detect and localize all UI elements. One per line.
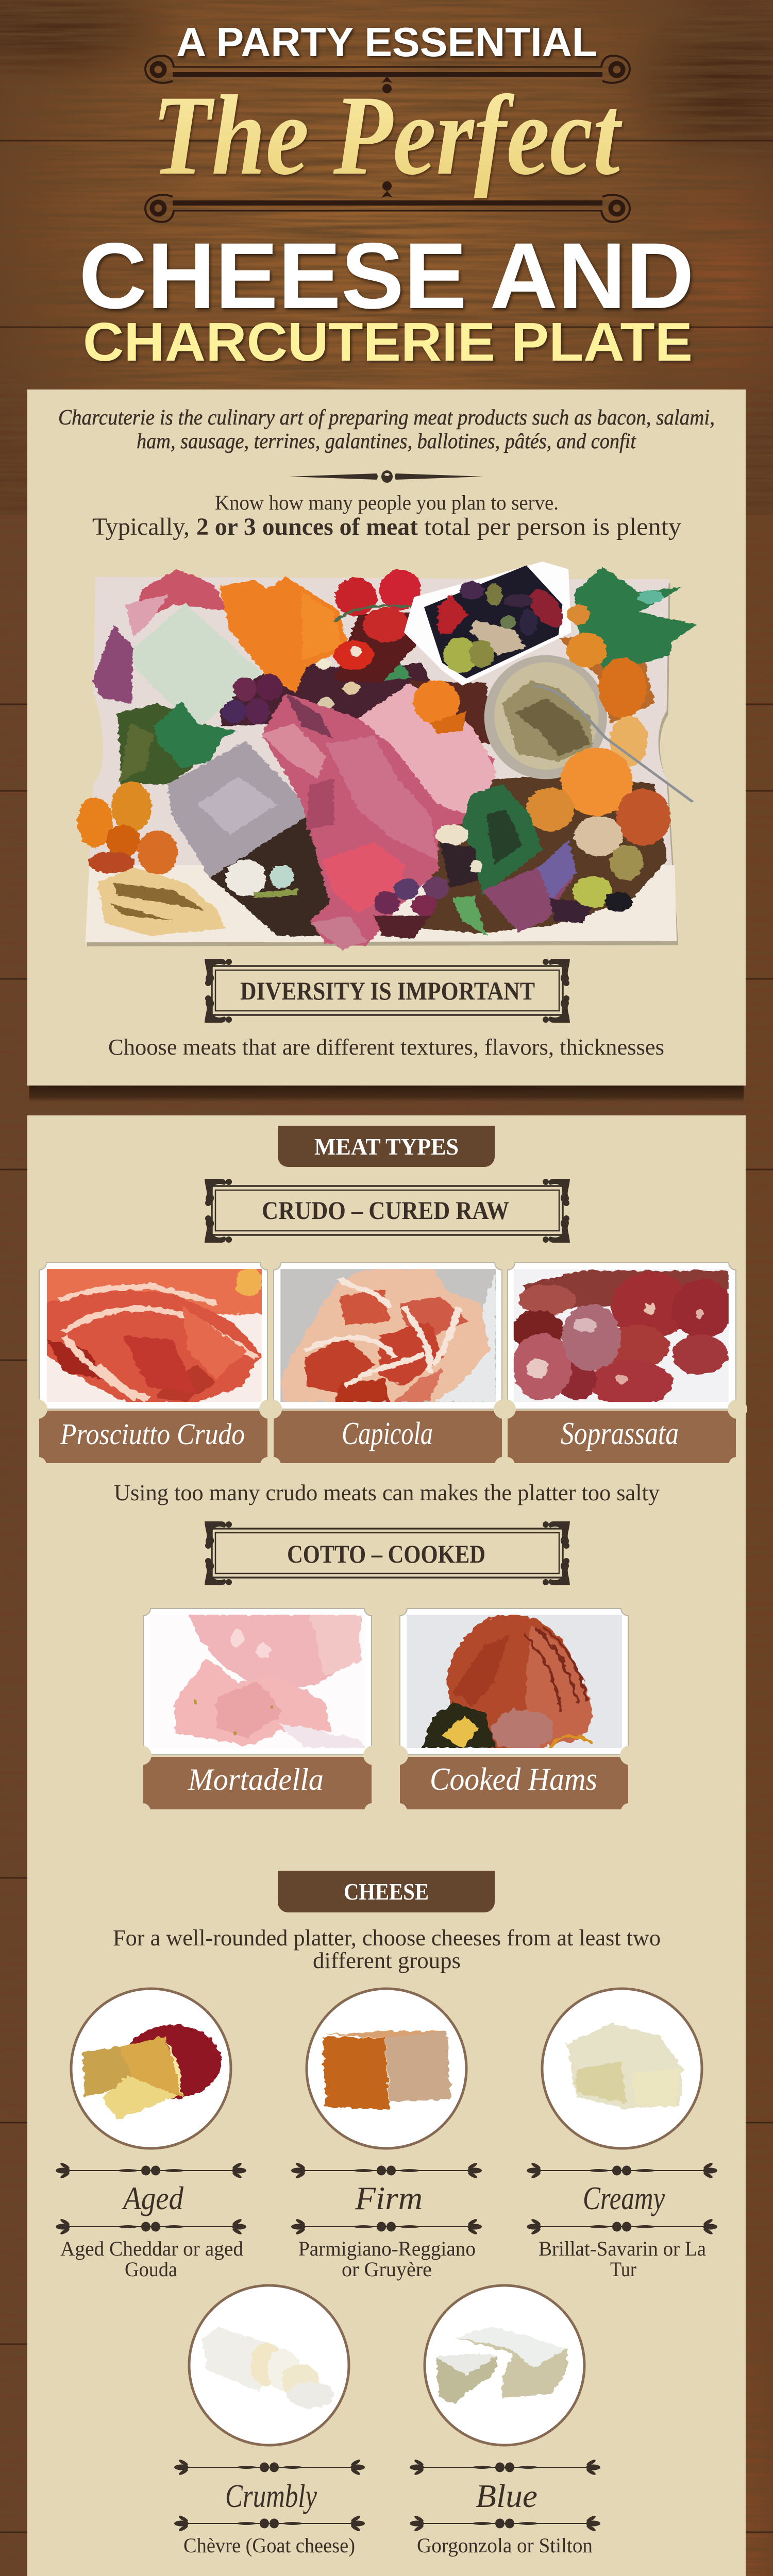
label: prosciutto crudo (28, 1399, 279, 1472)
ornament: lower scroll rule (145, 181, 630, 222)
heading frame: diversity is important: DIVERSITY IS IMPORTANT (240, 976, 535, 1005)
text: blue examples: Gorgonzola or Stilton (417, 2534, 593, 2557)
divider (174, 2459, 365, 2476)
title: the perfect: The Perfect (152, 72, 623, 199)
cheese: crumbly (174, 2285, 365, 2557)
ornament: top scroll rule (145, 56, 630, 93)
pill heading: meat types (278, 1126, 495, 1167)
intro italic text (58, 406, 715, 453)
text: creamy examples: Tur (610, 2258, 636, 2281)
panel: meat types and cheese (27, 1115, 747, 2576)
cheese: blue (410, 2285, 600, 2557)
text: firm examples: or Gruyère (342, 2258, 432, 2281)
icon: crumbly cheese circle (189, 2285, 349, 2445)
title: cheese and: CHEESE AND (79, 223, 694, 328)
card: mortadella (143, 1608, 372, 1755)
text: firm examples: Parmigiano-Reggiano (298, 2237, 476, 2260)
heading frame: crudo cured raw (205, 1179, 570, 1243)
text: crudo warning: Using too many crudo meats can makes the platter too salty (114, 1480, 660, 1505)
cheese: aged (56, 1989, 246, 2281)
label: firm: Firm (355, 2180, 423, 2216)
icon: aged cheese circle (71, 1989, 231, 2148)
panel: introduction (27, 389, 746, 1102)
label: soprassata (496, 1399, 747, 1472)
heading frame: cotto cooked (205, 1521, 570, 1585)
icon: blue cheese circle (425, 2285, 584, 2445)
cheese: firm (291, 1989, 482, 2281)
divider (410, 2459, 600, 2476)
pill heading: cheese (278, 1871, 495, 1912)
pill heading: meat types: MEAT TYPES (314, 1133, 459, 1160)
card: cooked ham (400, 1608, 628, 1755)
text: well-rounded platter: different groups (313, 1948, 461, 1973)
icon: firm cheese circle (307, 1989, 466, 2148)
text: well-rounded platter (113, 1925, 661, 1973)
heading frame: cotto cooked: COTTO – COOKED (287, 1539, 485, 1568)
card: prosciutto crudo (39, 1263, 271, 1409)
text: creamy examples: Brillat-Savarin or La (539, 2237, 706, 2260)
intro italic text: Charcuterie is the culinary art of preparing meat products such as bacon, salami, (58, 406, 715, 430)
cheese: creamy (527, 1989, 717, 2281)
divider (174, 2515, 365, 2532)
label: crumbly: Crumbly (225, 2478, 317, 2514)
label: capicola (262, 1399, 513, 1472)
card: capicola (274, 1263, 502, 1409)
divider (291, 2162, 482, 2179)
pill heading: cheese: CHEESE (344, 1878, 429, 1905)
text: aged examples: Aged Cheddar or aged (60, 2237, 243, 2260)
title: charcuterie plate: CHARCUTERIE PLATE (83, 312, 693, 372)
text: aged examples (60, 2237, 243, 2281)
label: cooked hams: Cooked Hams (430, 1762, 597, 1797)
heading frame: diversity is important (205, 959, 570, 1023)
serving guidance text: 2 or 3 ounces of meat (196, 513, 418, 540)
divider (410, 2515, 600, 2532)
label: capicola: Capicola (342, 1416, 433, 1451)
icon: creamy cheese circle (542, 1989, 702, 2148)
divider (527, 2162, 717, 2179)
text: choose meats: Choose meats that are different textures, flavors, thicknesses (108, 1035, 664, 1060)
title: a party essential: A PARTY ESSENTIAL (176, 19, 597, 65)
label: creamy: Creamy (583, 2180, 665, 2216)
text: creamy examples (539, 2237, 706, 2281)
heading frame: crudo cured raw: CRUDO – CURED RAW (262, 1196, 509, 1225)
divider (56, 2162, 246, 2179)
text: firm examples (298, 2237, 476, 2281)
ornament: small divider (289, 470, 483, 483)
label: blue: Blue (476, 2478, 537, 2514)
label: aged: Aged (121, 2180, 184, 2216)
photo: charcuterie platter (77, 562, 697, 950)
serving guidance text: Know how many people you plan to serve. (215, 491, 559, 514)
label: cooked hams (389, 1745, 640, 1819)
card: soprassata (508, 1263, 736, 1409)
text: crumbly examples: Chèvre (Goat cheese) (183, 2534, 355, 2557)
divider (291, 2218, 482, 2235)
label: mortadella: Mortadella (188, 1762, 324, 1797)
label: prosciutto crudo: Prosciutto Crudo (60, 1417, 245, 1451)
label: soprassata: Soprassata (561, 1416, 679, 1451)
label: mortadella (132, 1745, 383, 1819)
text: well-rounded platter: For a well-rounded platter, choose cheeses from at least two (113, 1925, 661, 1951)
serving guidance text: Typically, (92, 513, 190, 540)
intro italic text: ham, sausage, terrines, galantines, ballotines, pâtés, and confit (137, 430, 636, 453)
text: aged examples: Gouda (125, 2258, 177, 2281)
divider (56, 2218, 246, 2235)
divider (527, 2218, 717, 2235)
serving guidance text (92, 491, 681, 540)
serving guidance text: total per person is plenty (424, 513, 681, 540)
